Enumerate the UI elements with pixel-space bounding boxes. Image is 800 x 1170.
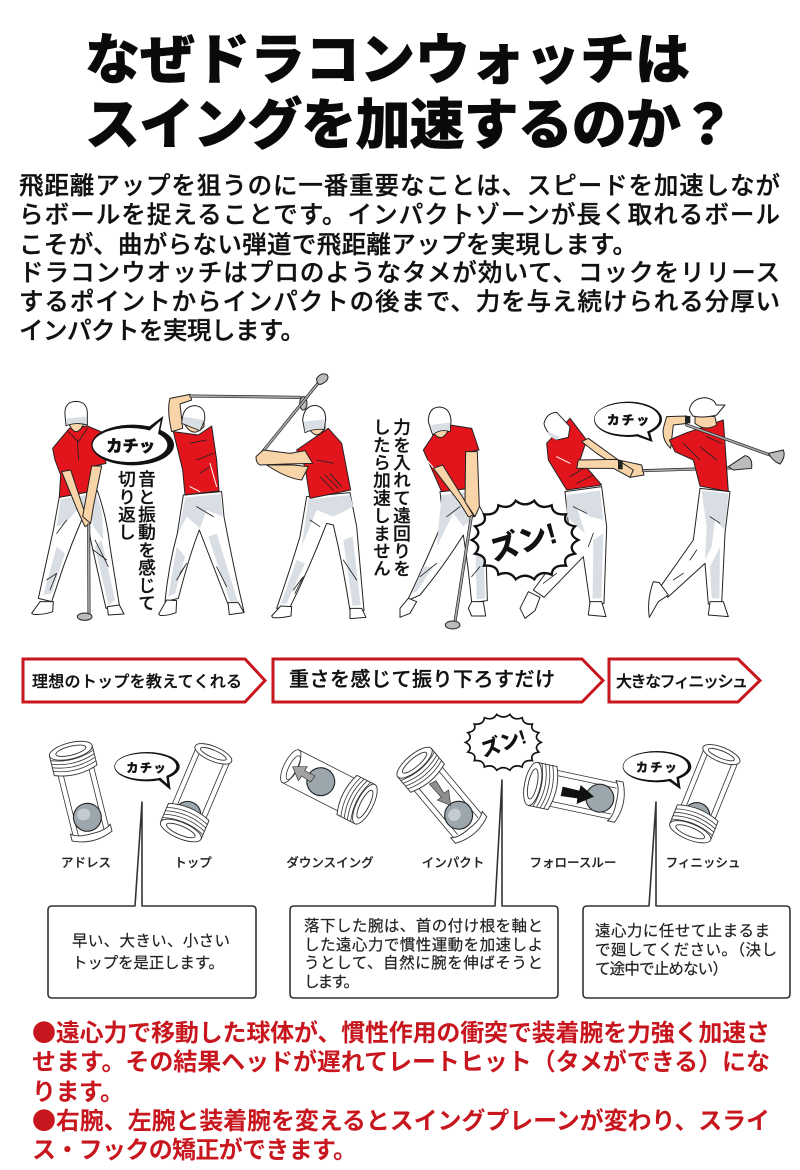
speech bubble: kachi right: [594, 402, 662, 442]
speech bubble: kachi top: [114, 752, 180, 790]
vertical caption: cut back: [116, 470, 156, 612]
callout: top correction: [48, 802, 256, 998]
step banner: big finish: [609, 659, 760, 702]
callout: falling arm: 落下した腕は、首の付け根を軸と: [304, 917, 543, 935]
intro text block: ドラコンウオッチはプロのようなタメが効いて、コックをリリース: [19, 259, 780, 287]
burst: small zun: [465, 714, 541, 770]
capsule phase labels: フィニッシュ: [666, 856, 740, 870]
capsule: downswing: [275, 744, 382, 827]
title: [85, 29, 735, 156]
burst: zun: ズン!: [486, 516, 561, 567]
capsule: top: [157, 739, 236, 847]
golfer 2: top of swing: [159, 394, 307, 615]
capsule phase labels: [61, 855, 740, 870]
vertical caption: acceleration warning: したら加速しません: [371, 418, 391, 577]
intro text block: [19, 172, 780, 345]
arrow: impact: [429, 781, 451, 805]
vertical caption: acceleration warning: 力を入れて遠回りを: [391, 418, 411, 577]
callout: centrifugal finish: て途中で止めない）: [595, 960, 728, 978]
title: スイングを加速するのか？: [85, 94, 735, 156]
burst: zun: [472, 501, 578, 579]
red summary text: ●右腕、左腕と装着腕を変えるとスイングプレーンが変わり、スライ: [32, 1101, 770, 1136]
golfer sequence right: [400, 398, 784, 629]
intro text block: するポイントからインパクトの後まで、力を与え続けられる分厚い: [19, 288, 780, 316]
speech bubble: kachi finish: [623, 751, 691, 789]
capsule phase labels: トップ: [174, 856, 212, 870]
golfer 6: finish: [649, 398, 784, 617]
step banner: ideal top: [23, 659, 265, 702]
vertical caption: cut back: 音と振動を感じて: [136, 470, 156, 612]
red summary text: ●遠心力で移動した球体が、慣性作用の衝突で装着腕を力強く加速さ: [32, 1013, 770, 1048]
golfer sequence left: [32, 374, 366, 620]
step banner: big finish: 大きなフィニッシュ: [616, 673, 748, 691]
capsule: follow through: [520, 761, 628, 825]
capsule: impact: [393, 742, 491, 848]
title: なぜドラコンウォッチは: [85, 29, 690, 91]
callout: falling arm: した遠心力で慣性運動を加速しよ: [304, 936, 543, 954]
intro text block: こそが、曲がらない弾道で飛距離アップを実現します。: [19, 231, 637, 259]
callout: top correction: トップを是正します。: [72, 954, 224, 972]
golfer 1: address: [32, 401, 124, 620]
red summary text: [32, 1013, 770, 1165]
intro text block: インパクトを実現します。: [19, 317, 305, 345]
capsule phase labels: インパクト: [422, 856, 484, 870]
capsule: address: [48, 738, 115, 846]
red summary text: せます。その結果ヘッドが遅れてレートヒット（タメができる）にな: [32, 1042, 770, 1077]
intro text block: 飛距離アップを狙うのに一番重要なことは、スピードを加速しなが: [19, 172, 780, 200]
callout: falling arm: します。: [304, 973, 359, 991]
callout: top correction: 早い、大きい、小さい: [72, 932, 230, 950]
speech bubble: kachi: カチッ: [106, 437, 155, 455]
callout: centrifugal finish: [583, 802, 790, 998]
step banner: feel the weight: 重さを感じて振り下ろすだけ: [289, 667, 555, 691]
speech bubble: kachi top: カチッ: [126, 761, 166, 775]
callout: centrifugal finish: 遠心力に任せて止まるま: [595, 922, 770, 940]
capsule phase labels: アドレス: [61, 856, 111, 870]
arrow: follow through: [561, 785, 594, 804]
intro text block: らボールを捉えることです。インパクトゾーンが長く取れるボール: [19, 201, 780, 229]
step banner: ideal top: 理想のトップを教えてくれる: [32, 673, 242, 691]
arrow: downswing: [293, 767, 315, 782]
golfer 4: impact: [400, 407, 487, 629]
vertical caption: acceleration warning: [371, 418, 411, 577]
capsule phase labels: フォロースルー: [530, 856, 616, 870]
vertical caption: cut back: 切り返し: [116, 470, 136, 541]
red summary text: ります。: [32, 1072, 124, 1107]
speech bubble: kachi: [91, 416, 174, 465]
callout: centrifugal finish: で廻してください。（決し: [595, 941, 777, 959]
golfer 3: downswing start: [256, 374, 366, 619]
speech bubble: kachi right: カチッ: [607, 414, 649, 428]
golfer 5: follow through: [520, 412, 752, 618]
capsule phase labels: ダウンスイング: [286, 855, 374, 870]
capsule: finish: [667, 740, 745, 847]
step banner: feel the weight: [273, 659, 603, 702]
red summary text: ス・フックの矯正ができます。: [32, 1130, 357, 1165]
speech bubble: kachi finish: カチッ: [636, 761, 677, 775]
callout: falling arm: うとして、自然に腕を伸ばそうと: [304, 954, 543, 972]
capsule diagrams: [48, 738, 382, 847]
burst: small zun: ズン!: [478, 724, 529, 762]
callout: falling arm: [290, 780, 558, 998]
